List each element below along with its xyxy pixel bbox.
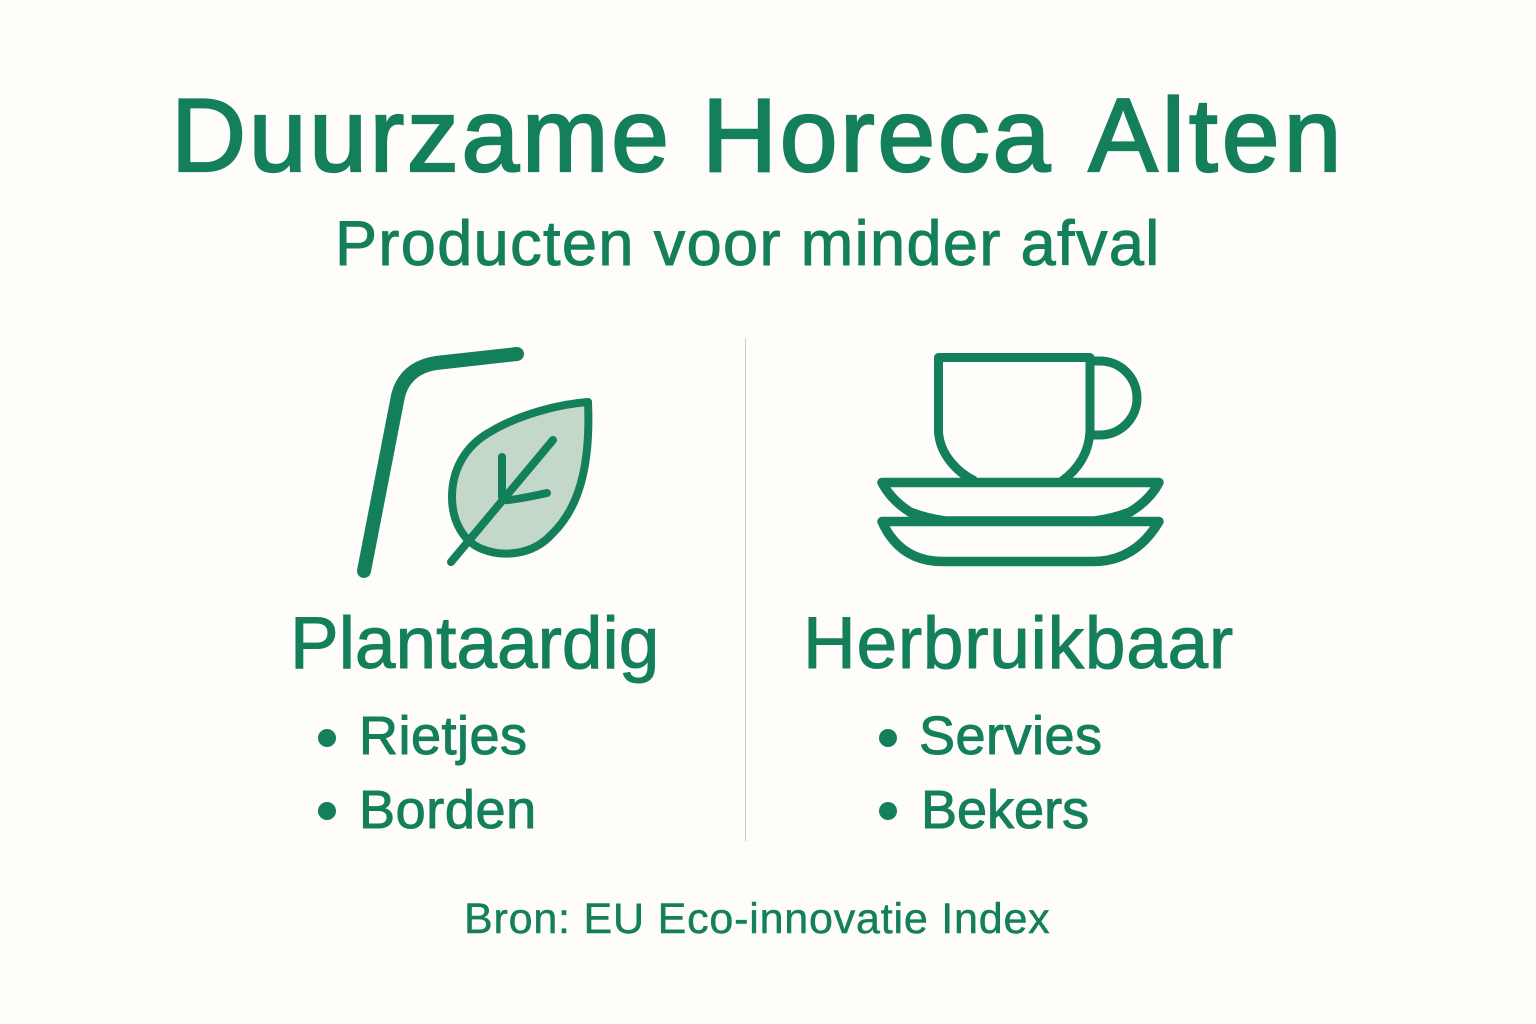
title: Duurzame Horeca Alten bbox=[171, 78, 1345, 194]
list: Herbruikbaar items bbox=[879, 706, 1103, 840]
list: Plantaardig items: Borden bbox=[359, 780, 537, 840]
list: Plantaardig items: Rietjes bbox=[359, 706, 528, 766]
list: Herbruikbaar items: Servies bbox=[919, 706, 1103, 766]
list: Plantaardig items bbox=[318, 706, 537, 840]
divider bbox=[745, 338, 746, 841]
list: Herbruikbaar items: Bekers bbox=[921, 780, 1089, 840]
heading: Plantaardig: Plantaardig bbox=[290, 603, 659, 684]
icon: straw and leaf bbox=[357, 347, 592, 578]
source: Bron: EU Eco-innovatie Index bbox=[464, 895, 1050, 943]
subtitle: Producten voor minder afval bbox=[335, 209, 1161, 279]
icon: cup and plates bbox=[877, 353, 1164, 566]
heading: Herbruikbaar: Herbruikbaar bbox=[803, 603, 1234, 684]
